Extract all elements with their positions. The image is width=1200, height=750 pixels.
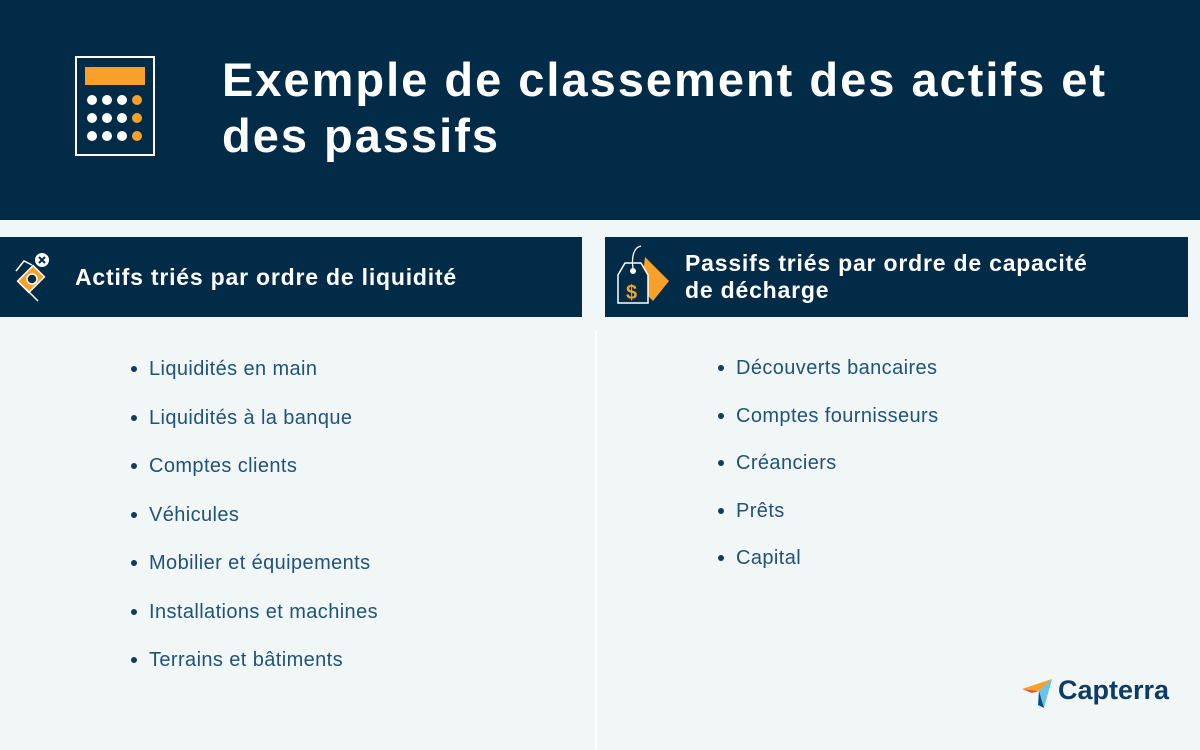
list: passifs: [718, 357, 939, 569]
title: Exemple de classement des actifs et: [222, 53, 1107, 106]
panel header: passifs: de décharge: [685, 277, 829, 303]
panel header: actifs: Actifs triés par ordre de liquidité: [75, 264, 457, 290]
list: passifs: Capital: [736, 547, 801, 569]
logo: Capterra: [1022, 675, 1170, 708]
icon: price tag: [617, 245, 669, 304]
panel header: passifs: [605, 237, 1188, 317]
title: [222, 53, 1107, 162]
list: passifs: Créanciers: [736, 452, 837, 474]
title: des passifs: [222, 109, 500, 162]
list: actifs: Véhicules: [149, 504, 239, 526]
list: actifs: Liquidités à la banque: [149, 406, 352, 428]
list: passifs: Prêts: [736, 500, 785, 522]
icon: hand with money: [16, 253, 49, 302]
list: actifs: Terrains et bâtiments: [149, 649, 343, 671]
icon: price tag: $: [626, 282, 638, 304]
list: passifs: Découverts bancaires: [736, 357, 937, 379]
logo: Capterra: Capterra: [1058, 675, 1169, 705]
list: actifs: Liquidités en main: [149, 358, 317, 380]
icon: calculator: [75, 56, 155, 156]
panel header: actifs: [0, 237, 582, 317]
header band: [0, 0, 1200, 220]
list: passifs: Comptes fournisseurs: [736, 404, 939, 426]
divider: [595, 330, 597, 750]
list: actifs: Comptes clients: [149, 455, 297, 477]
list: actifs: Mobilier et équipements: [149, 552, 371, 574]
panel header: passifs: Passifs triés par ordre de capacité: [685, 250, 1088, 276]
list: actifs: Installations et machines: [149, 600, 378, 622]
list: actifs: [131, 358, 378, 671]
